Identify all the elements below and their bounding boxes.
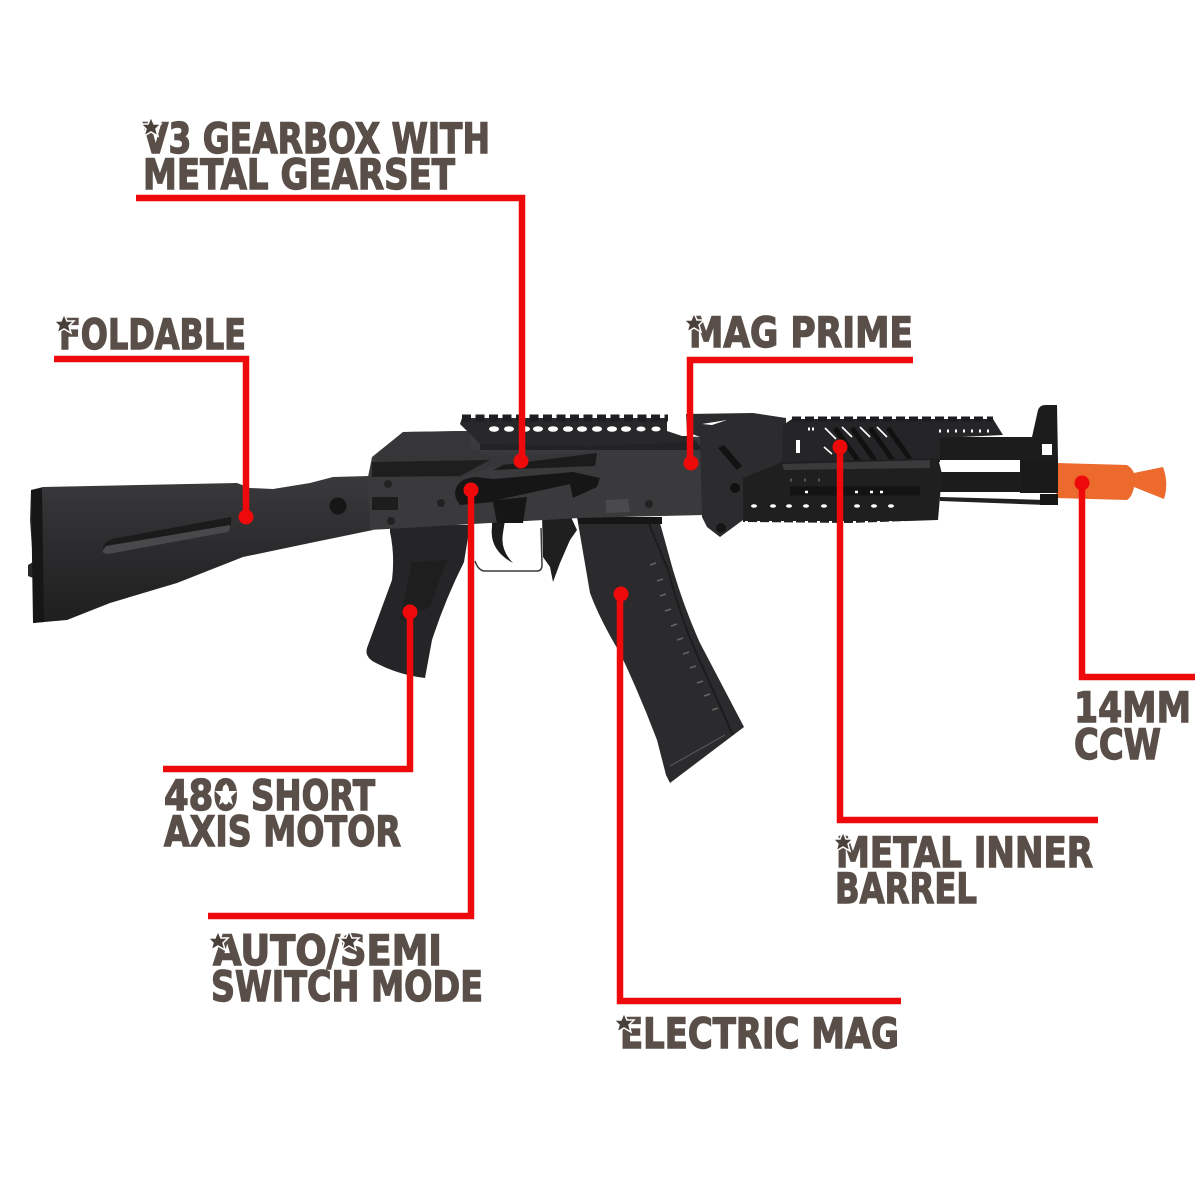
top rail [460,418,700,446]
label: v3 gearbox: V3 GEARBOX WITH [143,114,490,163]
line: mag prime [690,360,913,463]
label: 480 motor: SHORT [251,771,375,820]
receiver [368,431,704,530]
label: auto/semi: SWITCH MODE [211,962,483,1011]
line: auto/semi [208,490,471,916]
label: electric mag: ELECTRIC MAG [620,1009,899,1058]
label: 480 motor: 480 [164,771,238,820]
callout lines [54,198,1195,1001]
label: metal inner barrel: BARREL [835,864,977,913]
front trunnion block [686,413,786,537]
folding stock [28,476,373,623]
charging handle [493,453,597,470]
lower handguard [743,458,942,523]
gas tube, front sight and barrel [925,405,1058,505]
label: metal inner barrel [833,828,1093,913]
label: auto/semi: AUTO/SEMI [213,926,442,975]
upper handguard [782,419,1003,466]
label: 480 motor [164,771,401,856]
label: foldable: FOLDABLE [59,310,246,359]
label: v3 gearbox: METAL GEARSET [143,150,455,199]
label: auto/semi [208,926,483,1011]
pistol grip [366,525,470,678]
trigger guard and trigger [475,515,577,582]
line: 14mm [1082,483,1195,677]
selector lever [455,472,600,523]
line: electric mag [620,594,901,1001]
callout dots [238,440,1090,620]
label: mag prime: MAG PRIME [689,308,913,357]
label: metal inner barrel: METAL INNER [836,828,1093,877]
label: 14mm ccw [1074,683,1191,769]
rifle [28,405,1166,783]
line: foldable [54,359,246,517]
line: inner barrel [840,447,1098,820]
orange barrel tip [1056,463,1166,500]
label: 14mm ccw: CCW [1074,720,1161,769]
magazine [577,517,744,783]
label: v3 gearbox [141,114,490,199]
line: motor [163,612,410,769]
line: gearbox [136,198,522,463]
label: 480 motor: AXIS MOTOR [164,807,401,856]
